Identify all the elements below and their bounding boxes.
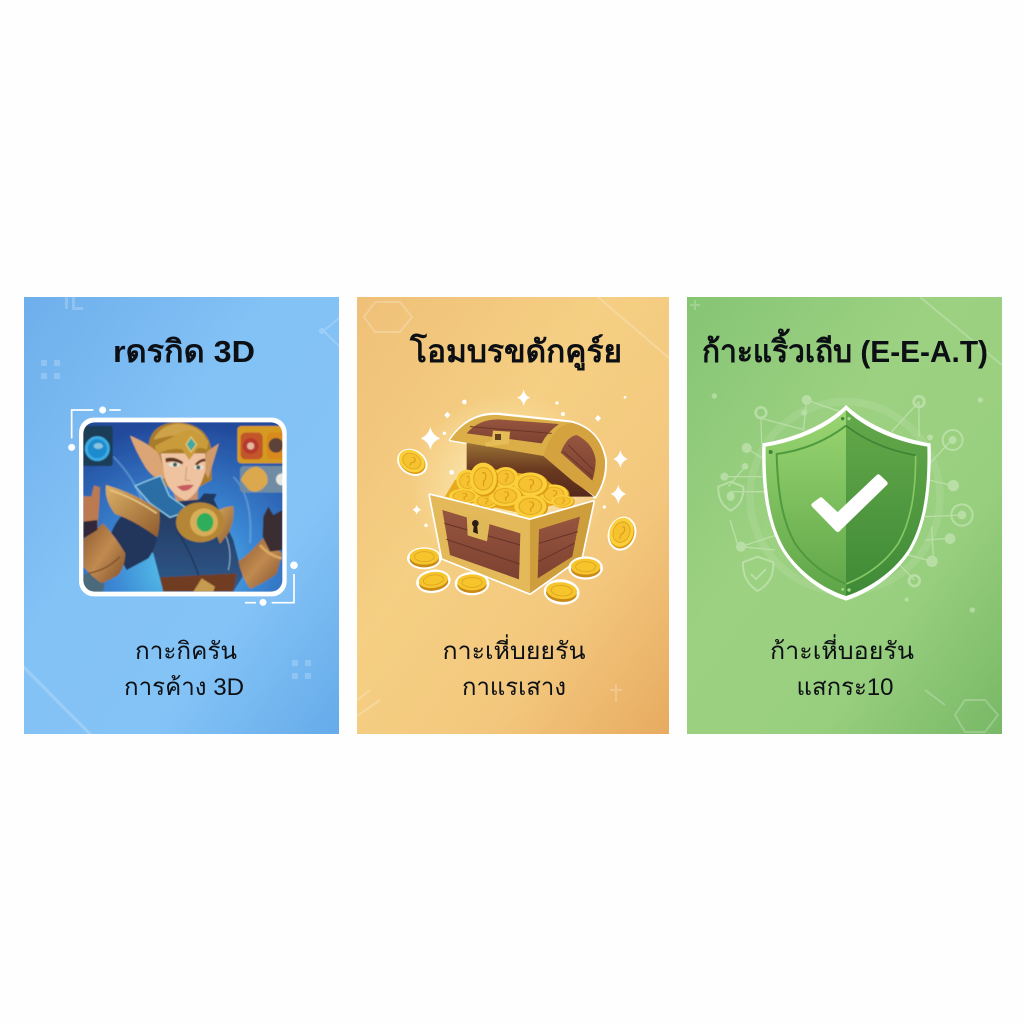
subtitle: แสกระ10 <box>796 674 894 701</box>
left sleeve <box>110 516 157 570</box>
keyhole plate <box>467 514 490 541</box>
treasure chest illustration <box>392 389 641 606</box>
collar <box>135 476 190 517</box>
subtitle <box>124 638 244 701</box>
panel: bonus card <box>357 297 669 734</box>
card background tech pattern <box>690 297 1002 732</box>
chest lid <box>450 414 606 497</box>
subtitle: กาะกิครัน <box>135 638 237 665</box>
panel: 3D game card <box>24 297 339 734</box>
subtitle <box>442 634 586 701</box>
face <box>161 453 205 501</box>
title: ก้าะแริ้วเถีบ (E-E-A.T) <box>702 328 988 369</box>
left shoulder armor <box>106 485 160 537</box>
game character image <box>79 418 288 598</box>
card background tech pattern <box>24 297 339 734</box>
right hand <box>263 507 282 552</box>
subtitle: กาแรเสาง <box>462 674 566 701</box>
subtitle: ก้าะเหี่บอยรัน <box>770 634 914 665</box>
coin pile <box>445 463 575 519</box>
right bracer <box>238 538 282 589</box>
neck <box>172 488 199 502</box>
UI panel right <box>237 426 287 463</box>
title: โอมบรขดักคูร์ย <box>409 333 622 371</box>
sparkles <box>412 389 628 527</box>
network decoration <box>712 393 983 613</box>
chest body <box>430 495 593 593</box>
right shoulder armor <box>216 505 234 544</box>
card background tech pattern <box>357 297 669 716</box>
shield <box>762 405 931 601</box>
subtitle <box>770 634 914 701</box>
left bracer <box>83 523 125 583</box>
left hand <box>83 485 100 538</box>
UI panel left <box>81 426 113 466</box>
belt <box>160 573 237 592</box>
subtitle: กาะเหี่บยยรัน <box>442 634 586 665</box>
diadem <box>155 429 209 460</box>
loose coins <box>392 443 641 606</box>
panel: E-E-A.T trust card <box>687 297 1002 734</box>
check mark <box>814 477 885 530</box>
brooch <box>176 502 224 542</box>
lid clasp <box>485 431 510 447</box>
frame corners <box>68 407 298 606</box>
ears <box>130 436 166 479</box>
torso <box>152 499 244 592</box>
title: rดรกิด 3D <box>113 334 255 369</box>
shield with network illustration <box>712 393 983 613</box>
hair <box>148 422 212 487</box>
subtitle: การค้าง 3D <box>124 674 244 701</box>
